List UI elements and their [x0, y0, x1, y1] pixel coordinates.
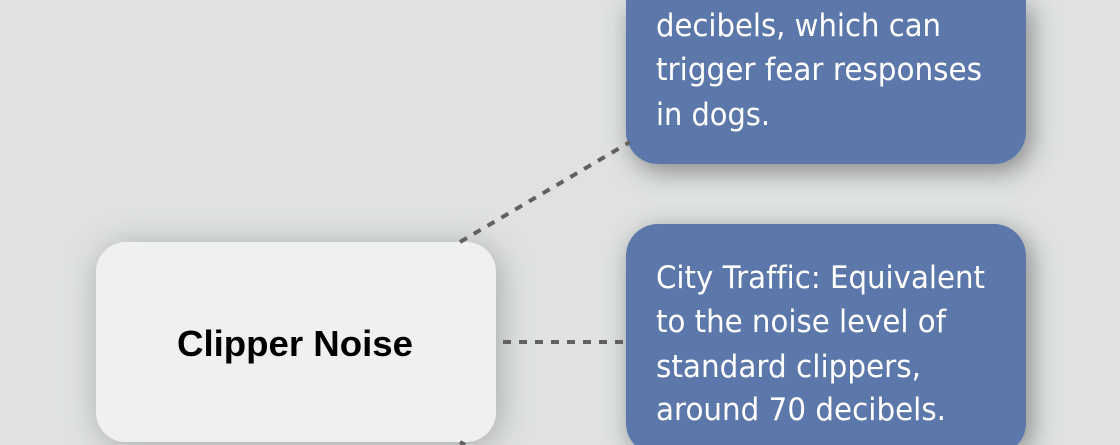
connector: node to city traffic card [503, 340, 623, 344]
connector: node to top card [460, 142, 630, 242]
text: top card: decibels, which can [656, 8, 941, 44]
text: top card: in dogs. [656, 97, 770, 133]
panel: top decibel card [626, 0, 1026, 164]
text: city traffic card [656, 260, 985, 428]
text: top card: trigger fear responses [656, 52, 982, 88]
text: city traffic card: standard clippers, [656, 349, 921, 385]
text: city traffic card: City Traffic: Equivalent [656, 260, 985, 296]
panel: city traffic card [626, 224, 1026, 445]
text: city traffic card: to the noise level of [656, 304, 947, 340]
connector: node to lower card [460, 442, 465, 445]
text: top card [656, 8, 982, 133]
text: city traffic card: around 70 decibels. [656, 392, 946, 428]
heading: Clipper Noise: Clipper Noise [177, 323, 413, 364]
panel: clipper noise node [96, 242, 496, 442]
